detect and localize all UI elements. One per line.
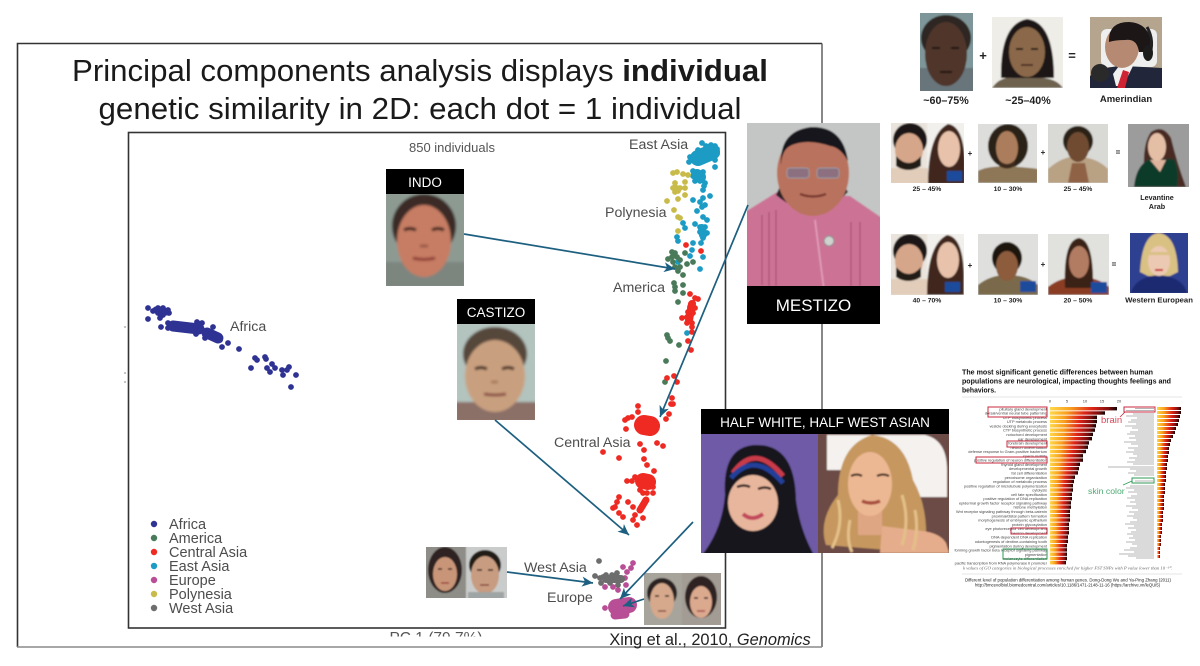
arrow: half white half West Asian to Europe	[620, 522, 693, 599]
photo: blonde woman	[816, 432, 951, 555]
label: 40 to 70 percent: 40 – 70%	[913, 298, 941, 304]
West Asia dots	[595, 561, 621, 585]
chart source	[965, 578, 1171, 588]
arrow: European faces to Europe	[623, 599, 644, 606]
bar labels: Wnt receptor signaling pathway through beta-catenin	[956, 509, 1047, 514]
bar labels: forebrain development	[1008, 440, 1048, 446]
chart heading	[962, 370, 1171, 394]
chart heading: behaviors.	[962, 388, 996, 394]
highlight boxes: brain-related categories	[976, 407, 1155, 534]
bar labels: peroxisome organization	[1005, 475, 1047, 480]
label: Amerindian: Amerindian	[1100, 94, 1152, 105]
region labels: West Asia	[524, 560, 587, 576]
legend: East Asia: East Asia	[169, 559, 230, 575]
face: Indigenous American man	[992, 17, 1063, 88]
bar labels	[954, 406, 1048, 565]
chart source: http://bmcevolbiol.biomedcentral.com/articles/10.1186/1471-2148-11-16 (https://archive.vn/leQUi5)	[975, 582, 1160, 588]
bar labels: dorsal/ventral neural tube patterning	[985, 411, 1047, 416]
bar labels: morphogenesis of embryonic epithelium	[978, 518, 1047, 523]
legend: Africa: Africa	[169, 517, 207, 533]
bar labels: ear development	[1018, 436, 1048, 441]
title: genetic similarity in 2D: each dot = 1 individual	[98, 91, 742, 126]
equals sign: =	[1116, 148, 1121, 157]
Africa dots	[148, 308, 296, 387]
America dots	[665, 252, 693, 382]
highlight boxes: skin colour categories	[1003, 478, 1154, 559]
MESTIZO photo	[745, 121, 882, 290]
chart heading: The most significant genetic differences between human	[962, 370, 1153, 376]
bar labels: fat cell differentiation	[1011, 470, 1047, 476]
title: Principal components analysis displays individual	[72, 53, 768, 88]
MESTIZO label: MESTIZO	[776, 296, 851, 315]
bar axis ticks: 5	[1066, 398, 1069, 404]
bar chart: biological process categories	[1050, 407, 1117, 564]
bar labels: proximal/distal pattern formation	[992, 513, 1047, 518]
bar axis ticks: 15	[1100, 398, 1105, 404]
panel: MESTIZO	[745, 121, 882, 324]
photos: West Asian composite faces	[426, 547, 507, 598]
legend: Central Asia: Central Asia	[169, 545, 248, 561]
panel: genetic differences chart	[954, 370, 1182, 588]
face: dark-haired man with EU flag	[978, 234, 1038, 295]
plus sign: +	[968, 149, 973, 158]
bar labels: epidermal growth factor receptor signaling pathway	[959, 500, 1047, 506]
faces: man and woman with EU flag	[891, 234, 964, 295]
bar labels: pigmentation	[1025, 552, 1047, 557]
bar labels: sperm motility	[1023, 453, 1047, 458]
bar labels: CTP biosynthetic process	[1003, 428, 1047, 433]
bar labels: odontogenesis of dentine-containing tooth	[975, 539, 1047, 544]
bar labels: pigmentation during development	[989, 543, 1048, 548]
callout: brain: brain	[1101, 415, 1122, 426]
callout: skin color: skin color	[1088, 486, 1125, 496]
bar labels: cell fate specification	[1011, 492, 1047, 497]
East Asia dots	[677, 143, 717, 333]
region labels: Europe	[547, 590, 593, 606]
legend: Polynesia: Polynesia	[169, 587, 233, 603]
legend: America: America	[169, 531, 223, 547]
Europe dots	[605, 563, 633, 615]
bar labels: vesicle docking during exocytosis	[989, 423, 1047, 428]
equals sign: =	[1112, 260, 1117, 269]
heading label: HALF WHITE, HALF WEST ASIAN	[720, 415, 930, 430]
INDO label: INDO	[408, 175, 442, 190]
equals sign: =	[1068, 48, 1076, 63]
bar labels: regulation of metabolic process	[993, 479, 1047, 484]
region labels	[230, 137, 688, 606]
callout: brain	[1101, 412, 1125, 426]
arrow: West Asian faces to West Asia	[507, 572, 593, 583]
bar labels: DNA-dependent DNA replication	[991, 535, 1047, 540]
region labels: Central Asia	[554, 435, 631, 451]
panel: Levantine Arab admixture	[889, 121, 1191, 211]
arrow: Indo to America	[464, 234, 675, 269]
citation: Xing et al., 2010, Genomics	[609, 631, 811, 649]
arrow: Castizo to Europe	[495, 420, 629, 535]
title	[72, 53, 768, 126]
bar labels: protein glycosylation	[1012, 522, 1047, 527]
label: 25 to 45 percent: 25 – 45%	[913, 186, 941, 193]
plus sign: +	[1041, 260, 1046, 269]
photo: Levantine woman	[1128, 124, 1189, 187]
photos: European composite faces	[644, 573, 721, 625]
heading label	[701, 409, 949, 434]
chart caption: k values of GO categories in biological processes enriched for higher FST SNPs with P value lower than 10⁻¹⁰.	[963, 566, 1172, 570]
bar labels: UTP biosynthetic process	[1003, 415, 1047, 420]
bar labels: UTP metabolic process	[1007, 419, 1047, 424]
label: 25 to 45 percent: 25 – 45%	[1064, 186, 1092, 193]
arrow: Mestizo to Central Asia	[660, 205, 748, 417]
bar labels: positive regulation of DNA replication	[983, 496, 1047, 501]
chart heading: populations are neurological, impacting thoughts feelings and	[962, 378, 1171, 386]
sample count label: 850 individuals	[409, 140, 495, 155]
legend: Europe: Europe	[169, 573, 216, 589]
plus sign: +	[979, 48, 987, 63]
MESTIZO label	[747, 286, 880, 324]
bar labels: neuron differentiation	[1011, 445, 1047, 450]
bar labels: defense response to Gram-positive bacterium	[968, 449, 1047, 454]
bar labels: thyroid gland development	[1001, 462, 1048, 467]
secondary category labels	[1108, 408, 1154, 558]
label: 10 to 30 percent: 10 – 30%	[994, 298, 1022, 304]
Central Asia dots	[603, 245, 701, 525]
slide frame	[17, 44, 822, 647]
bar labels: eye photoreceptor cell development	[985, 526, 1048, 531]
panel: half white half west asian	[699, 409, 951, 555]
label: 60 to 75 percent: ~60–75%	[923, 95, 969, 107]
bar labels: histone methylation	[1013, 505, 1047, 510]
face: dark-skinned ancestral woman	[920, 13, 973, 91]
bar labels: positive regulation of microtubule polymerization	[964, 483, 1047, 488]
label: 20 to 50 percent: 20 – 50%	[1064, 298, 1092, 304]
panel: INDO	[384, 169, 466, 288]
label: 10 to 30 percent: 10 – 30%	[994, 186, 1022, 193]
region labels: Polynesia	[605, 205, 667, 221]
photo: woman in hijab	[699, 432, 820, 555]
face: ancestral man in feathers	[1048, 124, 1108, 183]
bar labels: developmental growth	[1009, 466, 1047, 471]
face: braided woman with EU flag	[1048, 234, 1109, 295]
region labels: America	[613, 280, 665, 296]
legend: West Asia: West Asia	[169, 601, 234, 617]
CASTIZO label: CASTIZO	[467, 305, 525, 320]
region labels: East Asia	[629, 137, 688, 153]
bar axis ticks: 0	[1049, 398, 1052, 404]
label: Levantine Arab: Levantine	[1140, 193, 1174, 202]
chart source: Different level of population differentiation among human genes. Dong-Dong Wu and Ya-Ping Zhang (2011)	[965, 578, 1171, 582]
bar axis ticks: 20	[1117, 398, 1122, 404]
panel: CASTIZO	[455, 299, 537, 422]
Polynesia dots	[667, 172, 688, 231]
bar labels: positive regulation of neuron differentiation	[974, 458, 1047, 463]
plus sign: +	[968, 261, 973, 270]
panel: Amerindian admixture	[918, 11, 1162, 107]
panel: Western European admixture	[889, 231, 1193, 304]
label: 25 to 40 percent: ~25–40%	[1005, 95, 1051, 107]
label: Levantine Arab: Arab	[1149, 202, 1166, 211]
bar labels: notochord development	[1006, 432, 1048, 437]
bar chart: all categories	[1157, 407, 1181, 558]
faces: man and woman with EU flag	[891, 123, 964, 183]
arrows to clusters	[464, 205, 748, 606]
photo: blonde woman on blue	[1130, 233, 1188, 293]
plot frame	[124, 132, 726, 628]
bar labels: pacific transcription from RNA polymerase II promoter	[955, 560, 1048, 565]
bar axis ticks	[1049, 398, 1122, 404]
face: long curly-haired man	[978, 124, 1037, 183]
bar labels: melanocyte differentiation	[1003, 556, 1047, 561]
photo: Amerindian man with headphones	[1090, 17, 1162, 88]
bar labels: neuron development	[1012, 530, 1048, 535]
scatter plot	[148, 143, 717, 615]
clipped axis label: PC 1 (79.7%)	[389, 630, 483, 647]
CASTIZO composite face	[455, 322, 537, 422]
bar axis ticks: 10	[1083, 398, 1088, 404]
label: Western European: Western European	[1125, 296, 1193, 304]
plus sign: +	[1041, 148, 1046, 157]
INDO composite face	[384, 192, 466, 288]
region labels: Africa	[230, 319, 266, 335]
bar labels: forming growth factor beta receptor signaling pathway	[954, 548, 1047, 552]
bar labels: pituitary gland development	[999, 406, 1048, 411]
callout: skin color	[1088, 481, 1132, 496]
legend	[151, 517, 248, 617]
bar labels: cytolysis	[1032, 488, 1047, 493]
